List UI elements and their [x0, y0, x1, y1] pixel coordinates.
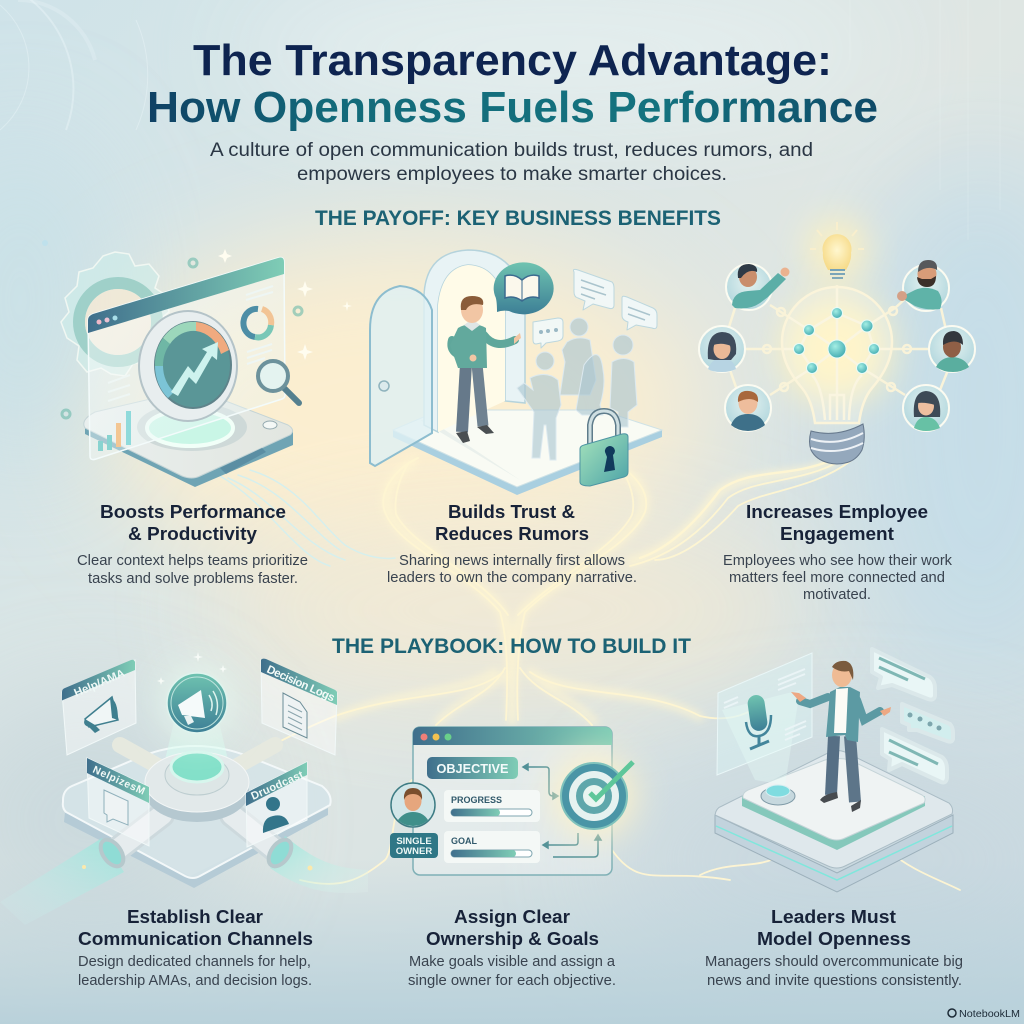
base platform: [715, 750, 953, 892]
arrows: [523, 764, 601, 857]
person 5: man: [929, 326, 975, 372]
benefit 3 text: matters feel more connected and: [729, 570, 945, 586]
bar chart: [98, 411, 131, 451]
playbook 3 text: [705, 906, 963, 989]
icon: magnifier: [258, 361, 299, 403]
title: How Openness Fuels Performance: [147, 83, 878, 132]
person 6: woman: [903, 385, 949, 431]
card: help/AMA: [62, 660, 136, 755]
playbook 1 text: [78, 906, 313, 989]
benefit 3 text: Increases Employee: [746, 501, 928, 522]
illustration: leader on platform: [715, 649, 953, 892]
playbook 2 text: Assign Clear: [454, 906, 571, 927]
single owner label: OWNER: [396, 846, 432, 857]
single owner label: SINGLE: [396, 836, 432, 847]
icon: small light bulb: [807, 220, 867, 280]
card: help/AMA: Help/AMA: [72, 668, 127, 700]
person: leader: [791, 661, 891, 812]
illustration: communication channels hub: [0, 652, 368, 925]
playbook 2 text: [408, 906, 616, 989]
pipes: [0, 745, 368, 925]
benefit 3 text: Employees who see how their work: [723, 553, 953, 569]
central hub: [145, 752, 249, 822]
goal card: [444, 831, 540, 863]
goal card: GOAL: [451, 836, 478, 846]
speech bubbles: [533, 269, 657, 348]
playbook 2 text: Make goals visible and assign a: [409, 954, 616, 970]
benefit 1 text: Clear context helps teams prioritize: [77, 553, 308, 569]
illustration: performance dashboard: [42, 240, 352, 487]
bulb glow: [781, 294, 891, 404]
icon: padlock: [580, 411, 628, 486]
benefit 1 text: Boosts Performance: [100, 501, 286, 522]
card: decision logs: [261, 659, 337, 755]
speech bubble: book: [494, 262, 554, 314]
sparkles: [157, 652, 227, 685]
sparkles: [218, 249, 352, 360]
icon: person: [263, 797, 289, 833]
benefit 1 text: tasks and solve problems faster.: [88, 571, 298, 587]
single owner label: [390, 833, 438, 858]
beam: [165, 705, 228, 760]
playbook 1 text: Design dedicated channels for help,: [78, 954, 311, 970]
benefit 3 text: motivated.: [803, 587, 871, 603]
person: speaker: [450, 296, 521, 443]
playbook 1 text: Communication Channels: [78, 928, 313, 949]
upper platform: [742, 758, 925, 850]
subtitle: [210, 140, 813, 185]
door: [370, 286, 432, 466]
card: broadcast: Druodcast: [249, 769, 306, 803]
benefit 1 text: & Productivity: [128, 523, 258, 544]
heading: the payoff: THE PAYOFF: KEY BUSINESS BENEFITS: [315, 207, 721, 230]
title: The Transparency Advantage:: [193, 36, 832, 85]
network nodes: [794, 308, 880, 374]
icon: target with check: [554, 756, 634, 836]
icon: donut chart: [243, 309, 271, 337]
benefit 3 text: [723, 501, 953, 603]
playbook 1 text: Establish Clear: [127, 906, 264, 927]
speech bubbles: [872, 649, 953, 782]
icon: megaphone badge: [161, 667, 233, 739]
gauge: [139, 311, 237, 421]
platform: [393, 410, 662, 495]
playbook 3 text: news and invite questions consistently.: [707, 973, 962, 989]
progress card: [444, 790, 540, 822]
window: [413, 727, 612, 875]
illustration: engagement light bulb: [699, 220, 975, 464]
person 2: woman: [699, 326, 745, 372]
window panel: [88, 258, 285, 460]
icon: document: [283, 693, 307, 738]
benefit 2 text: Reduces Rumors: [435, 523, 589, 544]
card: decision logs: Decision Logs: [265, 664, 336, 704]
playbook 3 text: Model Openness: [757, 928, 911, 949]
flow lines connecting sections: [220, 458, 960, 890]
heading: the playbook: THE PLAYBOOK: HOW TO BUILD IT: [332, 635, 691, 658]
bulb base: [810, 424, 864, 464]
benefit 2 text: Builds Trust &: [448, 501, 575, 522]
people: blurred audience: [517, 318, 637, 460]
notebooklm watermark: NotebookLM: [959, 1008, 1020, 1020]
light bulb: [782, 287, 892, 423]
playbook 3 text: Managers should overcommunicate big: [705, 954, 963, 970]
benefit 2 text: leaders to own the company narrative.: [387, 570, 637, 586]
subtitle: A culture of open communication builds trust, reduces rumors, and: [210, 140, 813, 161]
objective pill: OBJECTIVE: [436, 761, 509, 776]
benefit 3 text: Engagement: [780, 523, 895, 544]
objective pill: [427, 757, 518, 779]
card: broadcast: [246, 762, 307, 847]
card: helpdesk: NelpizesM: [91, 764, 147, 798]
avatar: [391, 783, 435, 827]
benefit 2 text: [387, 501, 637, 586]
arch: [424, 250, 525, 432]
platform: [84, 391, 293, 487]
person 3: man: [725, 385, 771, 431]
illustration: ownership and goals window: [390, 727, 634, 875]
title: [147, 36, 878, 132]
benefit 2 text: Sharing news internally first allows: [399, 553, 625, 569]
subtitle: empowers employees to make smarter choices.: [297, 164, 727, 185]
icon: chat bubble: [104, 790, 128, 825]
benefit 1 text: [77, 501, 308, 587]
illustration: open door and trust: [370, 250, 662, 495]
hologram panel: [717, 653, 812, 785]
base platform: [63, 746, 331, 888]
person 4: bearded man: [897, 260, 949, 311]
projector button: [761, 785, 795, 805]
icon: gear: [61, 252, 169, 376]
person 1: pointing: [726, 264, 790, 310]
icon: microphone: [746, 694, 771, 749]
card: helpdesk: [87, 758, 149, 846]
icon: upward arrow: [171, 342, 218, 396]
network links: [728, 285, 948, 420]
playbook 3 text: Leaders Must: [771, 906, 897, 927]
playbook 2 text: single owner for each objective.: [408, 973, 616, 989]
icon: megaphone: [84, 697, 118, 733]
playbook 2 text: Ownership & Goals: [426, 928, 599, 949]
playbook 1 text: leadership AMAs, and decision logs.: [78, 973, 312, 989]
progress card: PROGRESS: [451, 795, 502, 805]
